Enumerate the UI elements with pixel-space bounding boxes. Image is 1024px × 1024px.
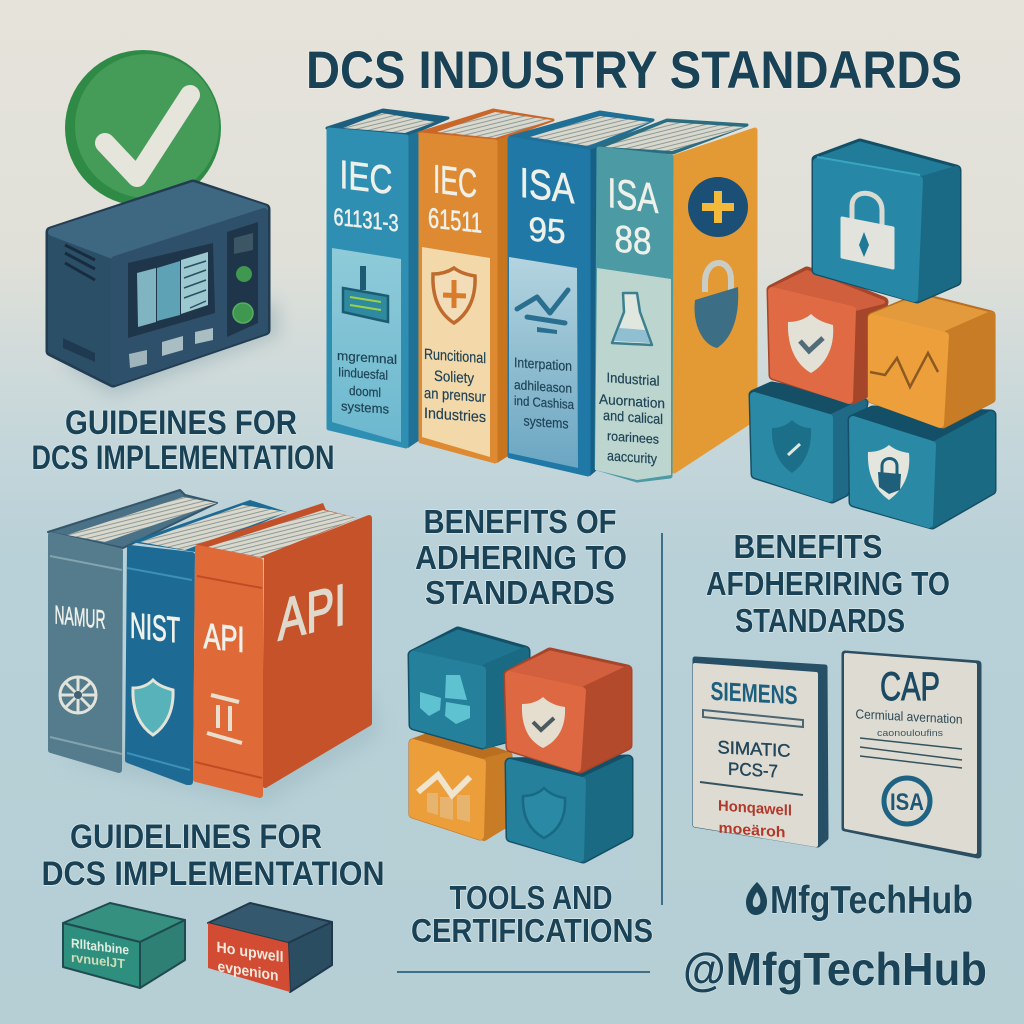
cube: teal blocks: [413, 632, 525, 745]
cube: red shield: [772, 272, 883, 400]
heading: guidelines upper: DCS IMPLEMENTATION: [32, 439, 334, 477]
cube: teal shield: [510, 760, 628, 858]
book: ISA 88: ISA: [608, 169, 659, 222]
book: IEC 61131-3: [327, 110, 448, 448]
box: green module: rvnuelJT: [71, 950, 125, 971]
book: ISA 95: ISA: [519, 159, 575, 212]
heading: benefits right: STANDARDS: [735, 602, 905, 639]
heading: benefits right: AFDHERIRING TO: [706, 565, 950, 602]
book: API: [195, 503, 369, 795]
book: NIST: NIST: [130, 604, 180, 651]
certificate card: CAP: caonouloufins: [877, 728, 944, 738]
cube: orange pulse: [870, 297, 991, 424]
certificate card: Siemens: SIEMENS: [710, 676, 798, 710]
certificate card: CAP: ISA: [890, 789, 924, 816]
book: ISA 88: roarinees: [607, 428, 659, 447]
heading: benefits right: [706, 528, 950, 639]
handle: @MfgTechHub: @MfgTechHub: [683, 943, 987, 995]
heading: tools and certifications: CERTIFICATIONS: [411, 912, 653, 949]
certificate card: Siemens: SIMATIC: [718, 737, 790, 761]
book: ISA 95: Interpation: [514, 354, 572, 374]
book: IEC 61511: [419, 110, 553, 463]
book: IEC 61511: Soliety: [434, 368, 474, 387]
cube: orange chart: [413, 733, 508, 837]
cube: red shield: [509, 653, 627, 768]
heading: guidelines upper: [32, 404, 334, 477]
book: ISA 88: [595, 120, 755, 480]
divider: horizontal line: [397, 971, 650, 973]
heading: benefits middle: STANDARDS: [425, 574, 615, 611]
certificate card: Siemens: Honqawell: [718, 797, 792, 820]
book: ISA 88: Auornation: [599, 391, 665, 411]
certificate card: CAP: Cermiual avernation: [856, 706, 962, 727]
divider: vertical line: [661, 533, 663, 905]
heading: benefits middle: ADHERING TO: [415, 539, 627, 576]
book: IEC 61511: an prensur: [424, 385, 486, 406]
certificate card: Siemens: moeäroh: [718, 820, 786, 841]
certificate card: CAP: CAP: [880, 665, 940, 709]
cube: teal top lock: [817, 144, 956, 298]
book: IEC 61131-3: dooml: [349, 383, 381, 400]
heading: guidelines lower: [42, 818, 384, 893]
book: IEC 61511: 61511: [428, 202, 482, 239]
title: DCS INDUSTRY STANDARDS: [306, 41, 962, 100]
book: API: API: [204, 615, 244, 660]
book: NAMUR: [48, 490, 217, 770]
book: ISA 95: ind Cashisa: [514, 393, 575, 412]
box: green module: Rlltahbine: [71, 935, 129, 958]
book: NIST: [127, 500, 287, 782]
book: IEC 61131-3: mgremnal: [337, 348, 397, 367]
heading: guidelines lower: DCS IMPLEMENTATION: [42, 855, 384, 893]
heading: guidelines upper: GUIDEINES FOR: [65, 404, 297, 442]
book: API: API: [278, 572, 346, 653]
book: ISA 95: systems: [524, 412, 568, 432]
box: red module: Ho upwell: [216, 939, 284, 966]
heading: tools and certifications: [411, 879, 653, 949]
certificate card: Siemens: [695, 659, 826, 845]
book: ISA 95: adhileason: [514, 377, 572, 396]
heading: tools and certifications: TOOLS AND: [450, 879, 612, 916]
cube group: benefits: [413, 632, 628, 858]
heading: benefits middle: BENEFITS OF: [424, 503, 616, 540]
book: IEC 61131-3: Iinduesfal: [338, 364, 388, 383]
cube: teal lower right shield lock: [853, 411, 991, 524]
certificate card: CAP: [845, 654, 978, 855]
book: IEC 61511: IEC: [433, 156, 477, 207]
book: IEC 61511: Runcitional: [424, 346, 486, 367]
box: red module: evpenion: [218, 958, 278, 985]
box: green module: [63, 903, 185, 988]
book: IEC 61131-3: IEC: [340, 152, 392, 203]
book: ISA 88: Industrial: [606, 369, 660, 389]
book: ISA 95: 95: [528, 210, 566, 252]
cube stack: security: [754, 144, 991, 524]
icon: green check badge: [65, 50, 221, 206]
book: ISA 95: [509, 112, 653, 476]
certificate card: Siemens: PCS-7: [728, 759, 778, 781]
book: IEC 61131-3: 61131-3: [334, 204, 398, 237]
book: ISA 88: and calical: [603, 407, 663, 427]
book: IEC 61131-3: systems: [341, 398, 390, 417]
icon: control device: [51, 185, 280, 395]
book: NAMUR: NAMUR: [55, 599, 105, 635]
book: IEC 61511: Industries: [424, 405, 486, 426]
book group: NAMUR NIST API: [48, 490, 380, 805]
heading: benefits middle: [415, 503, 627, 611]
box: red module: [208, 903, 332, 992]
heading: guidelines lower: GUIDELINES FOR: [70, 818, 322, 856]
book: ISA 88: 88: [614, 218, 652, 264]
logo: MfgTechHub: MfgTechHub: [770, 879, 973, 922]
heading: benefits right: BENEFITS: [734, 528, 882, 565]
book: ISA 88: aaccurity: [607, 447, 657, 467]
cube: teal lower left shield: [754, 387, 863, 498]
